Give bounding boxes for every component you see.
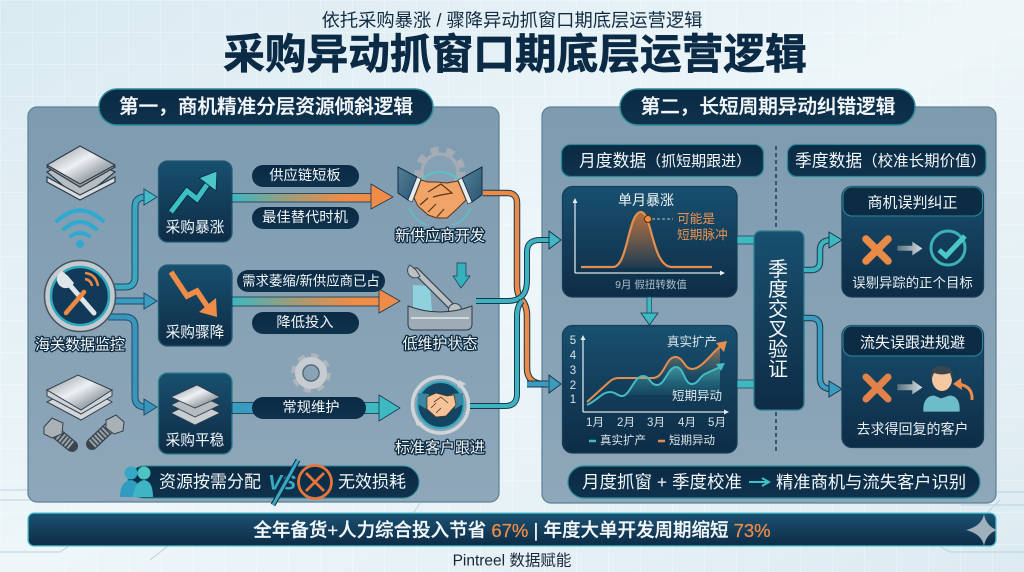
heading: quarterly data: 季度数据（校准长期价值） xyxy=(795,152,986,170)
tier box: purchase stable: 采购平稳 xyxy=(166,432,225,449)
icon: plates and bolts xyxy=(44,375,124,446)
chart: real expansion vs short-term: 2 xyxy=(570,380,576,392)
panel heading left: 第一，商机精准分层资源倾斜逻辑 xyxy=(119,96,413,118)
chart: real expansion vs short-term: 1 xyxy=(570,394,576,406)
icon: customs monitoring badge xyxy=(44,260,116,332)
icon: stacked plates xyxy=(171,385,220,425)
footer credit: Pintreel 数据赋能 xyxy=(453,552,571,570)
icon: falling arrow xyxy=(171,272,217,317)
chart: real expansion vs short-term: 4月 xyxy=(678,417,696,429)
tier box: purchase surge xyxy=(158,161,232,242)
panel heading right xyxy=(620,89,915,125)
subtitle: 依托采购暴涨 / 骤降异动抓窗口期底层运营逻辑 xyxy=(322,10,702,30)
arrow: chart to chart xyxy=(641,297,658,325)
chart legend xyxy=(589,433,715,447)
card: churn follow-up avoidance: 流失误跟进规避 xyxy=(860,334,965,352)
result bar: 全年备货+人力综合投入节省 67% | 年度大单开发周期缩短 73% xyxy=(253,520,771,540)
box: quarterly cross validation: 度 xyxy=(768,278,788,301)
chart: real expansion vs short-term: 2月 xyxy=(617,417,635,429)
connectors from monitor to tiers xyxy=(108,189,157,415)
connectors: validation to outcomes xyxy=(804,232,842,397)
label: new supplier development: 新供应商开发 xyxy=(395,226,485,244)
arrow: plunge to low maintenance xyxy=(232,289,400,313)
icon: standard follow-up badge xyxy=(412,377,468,433)
divider xyxy=(775,146,777,452)
pill: routine maintenance: 常规维护 xyxy=(282,399,340,416)
icon: cross circle xyxy=(298,466,332,498)
main title: 采购异动抓窗口期底层运营逻辑 xyxy=(223,30,807,78)
chart: real expansion vs short-term: 1月 xyxy=(586,417,604,429)
box: quarterly cross validation: 叉 xyxy=(768,319,788,341)
chart legend: 真实扩产 xyxy=(600,433,646,447)
card: opportunity misjudgment correction: 商机误判纠正 xyxy=(867,194,958,212)
icon: wifi signal xyxy=(57,210,103,248)
card: churn follow-up avoidance: 去求得回复的客户 xyxy=(856,421,968,437)
summary pill: allocation vs waste: 无效损耗 xyxy=(338,472,406,492)
chart: real expansion vs short-term: 3月 xyxy=(647,417,665,429)
tier box: purchase stable xyxy=(158,373,232,454)
summary pill: monthly + quarterly: 精准商机与流失客户识别 xyxy=(776,472,966,492)
label: customs monitoring: 海关数据监控 xyxy=(35,336,125,354)
tier box: purchase plunge xyxy=(158,265,232,346)
card: opportunity misjudgment correction xyxy=(842,186,984,297)
chart: real expansion vs short-term: 短期异动 xyxy=(672,389,722,403)
arrow: stable to standard follow-up xyxy=(232,395,400,421)
icon: people xyxy=(120,466,153,497)
card: opportunity misjudgment correction: 误剔异踪的正个目标 xyxy=(852,276,973,290)
connectors: charts to cross validation xyxy=(737,236,754,388)
card: churn follow-up avoidance xyxy=(842,326,984,448)
chart: single month surge: 短期脉冲 xyxy=(677,228,728,242)
pill: demand shrink xyxy=(237,270,385,292)
chart: real expansion vs short-term: 3 xyxy=(570,365,576,377)
icon: cross to check xyxy=(866,231,965,265)
pill: reduce investment: 降低投入 xyxy=(276,314,334,331)
pill: demand shrink: 需求萎缩/新供应商已占 xyxy=(242,272,380,288)
box: quarterly cross validation: 验 xyxy=(768,338,788,361)
title block xyxy=(223,10,807,78)
heading: quarterly data xyxy=(788,144,986,176)
box: quarterly cross validation: 交 xyxy=(768,298,788,321)
label: low maintenance: 低维护状态 xyxy=(402,336,478,352)
VS mark: VS xyxy=(268,472,296,494)
cross-panel connectors xyxy=(470,193,561,406)
chart: single month surge: 9月 假扭转数值 xyxy=(615,278,687,291)
tier box: purchase surge: 采购暴涨 xyxy=(166,219,225,236)
chart: single month surge: 单月暴涨 xyxy=(618,192,674,208)
pill: supply chain weakness xyxy=(252,165,359,187)
VS mark xyxy=(268,460,298,505)
pill: reduce investment xyxy=(252,312,359,334)
summary pill: monthly + quarterly: 月度抓窗 + 季度校准 xyxy=(582,472,742,492)
summary pill: monthly + quarterly xyxy=(568,466,980,498)
chart: real expansion vs short-term: 4 xyxy=(570,350,577,362)
panel: right - period correction xyxy=(470,89,996,503)
arrow: surge to new supplier xyxy=(232,184,393,209)
chart: real expansion vs short-term: 真实扩产 xyxy=(667,334,717,349)
chart: real expansion vs short-term xyxy=(562,326,737,453)
heading: monthly data xyxy=(562,144,764,176)
box: quarterly cross validation: 季 xyxy=(768,258,788,281)
box: quarterly cross validation xyxy=(754,231,804,410)
pill: best replacement timing: 最佳替代时机 xyxy=(262,209,348,226)
panel heading right: 第二，长短周期异动纠错逻辑 xyxy=(641,96,895,118)
icon: sparkle xyxy=(966,514,997,546)
summary pill: allocation vs waste: 资源按需分配 xyxy=(159,472,261,492)
icon: handshake with gear xyxy=(398,150,482,225)
tier box: purchase plunge: 采购骤降 xyxy=(166,324,225,341)
chart: single month surge: 可能是 xyxy=(677,212,715,226)
pill: supply chain weakness: 供应链短板 xyxy=(269,166,341,184)
icon: gear xyxy=(294,356,328,390)
chart: single month surge xyxy=(562,186,737,297)
pill: best replacement timing xyxy=(252,207,359,229)
box: quarterly cross validation: 证 xyxy=(768,358,788,381)
panel heading left xyxy=(99,89,433,125)
chart legend: 短期异动 xyxy=(669,433,715,447)
chart: real expansion vs short-term: 5月 xyxy=(708,417,726,429)
arrow xyxy=(749,478,769,486)
summary pill: allocation vs waste xyxy=(120,460,419,505)
chart: real expansion vs short-term: 5 xyxy=(570,335,576,347)
icon: steel plates stack xyxy=(47,146,115,200)
icon: low maintenance tray with wrench xyxy=(408,263,472,330)
heading: monthly data: 月度数据（抓短期跟进） xyxy=(579,152,751,170)
panel: left - opportunity tiering xyxy=(28,89,499,505)
result bar xyxy=(28,513,997,546)
icon: rising arrow xyxy=(171,171,217,212)
pill: routine maintenance xyxy=(252,397,366,419)
icon: cross to returning customer xyxy=(866,366,972,412)
label: standard follow-up: 标准客户跟进 xyxy=(395,440,485,456)
